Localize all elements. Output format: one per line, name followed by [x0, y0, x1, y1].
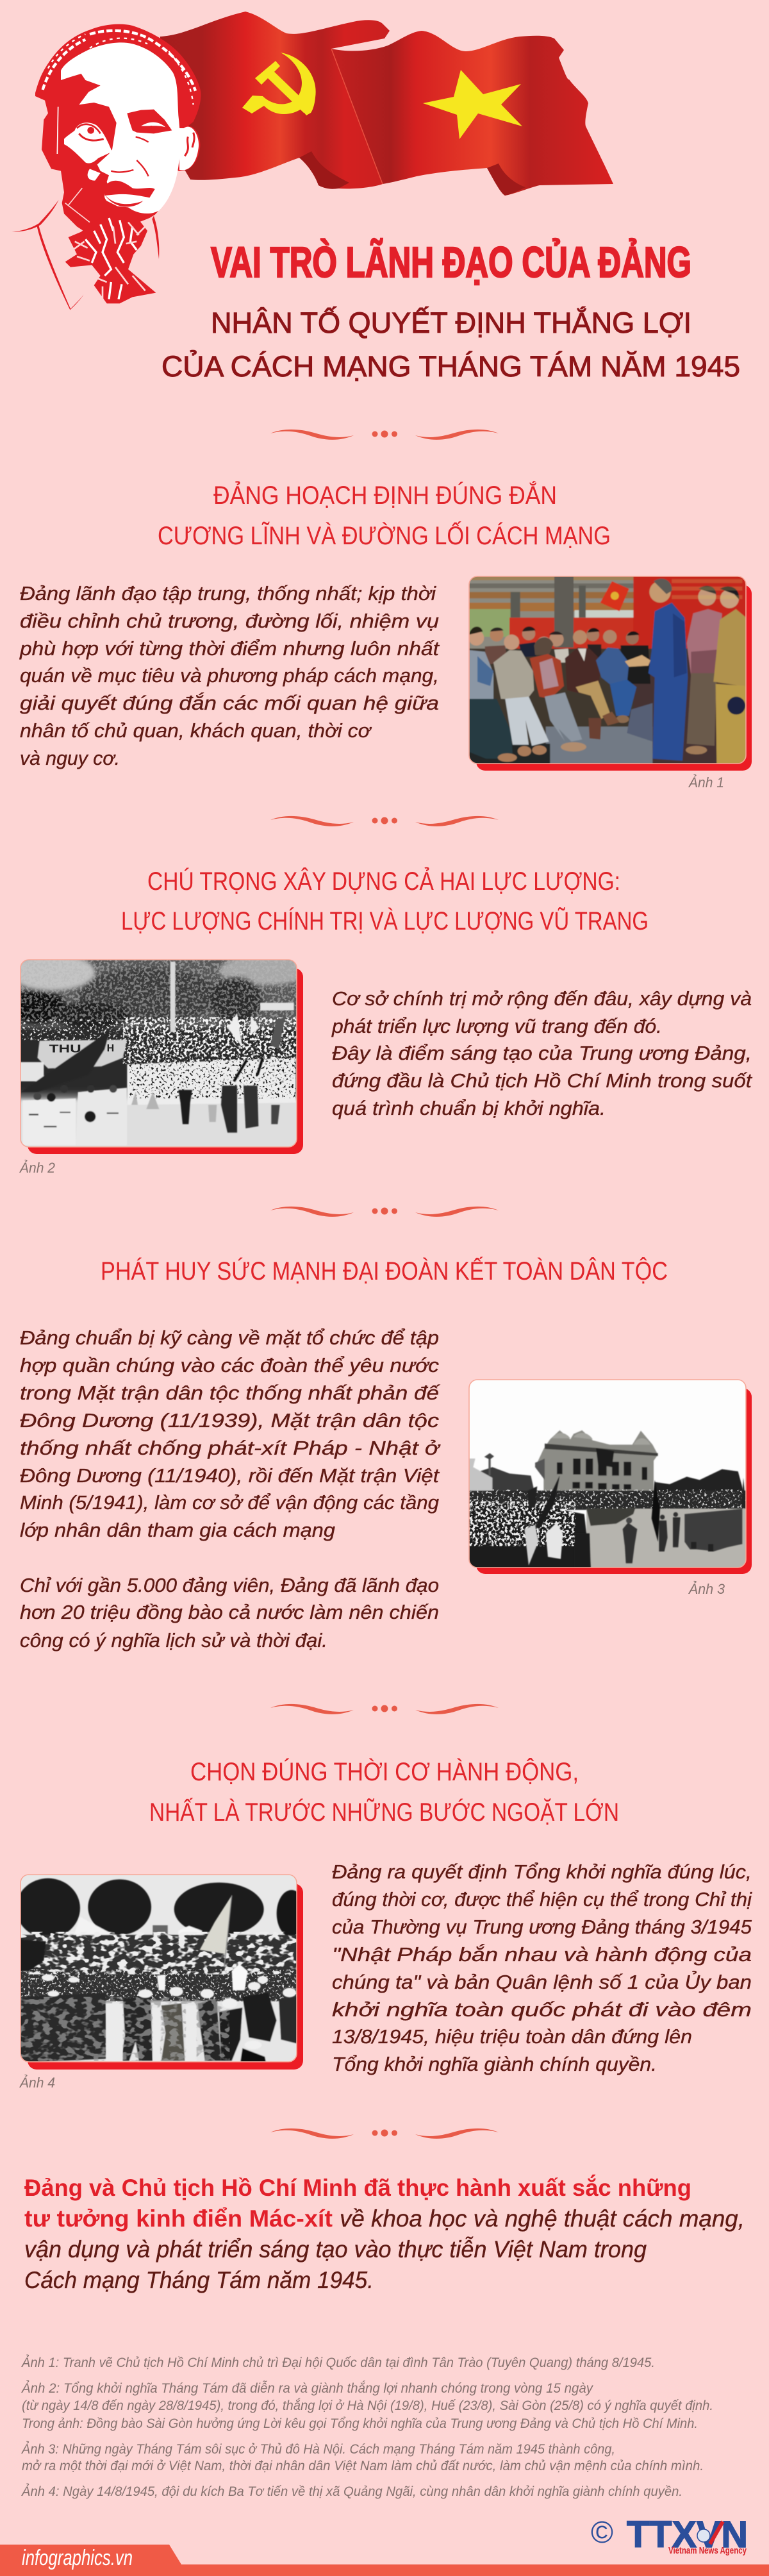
- text block: section 3: hơn 20 triệu đồng bào cả nước làm nên chiến: [20, 1601, 439, 1623]
- text block: section 3: Minh (5/1941), làm cơ sở để vận động các tầng: [20, 1491, 439, 1514]
- heading: section 4: CHỌN ĐÚNG THỜI CƠ HÀNH ĐỘNG,: [190, 1757, 579, 1786]
- text block: section 3: Chỉ với gần 5.000 đảng viên, Đảng đã lãnh đạo: [20, 1574, 439, 1596]
- text block: section 4: khởi nghĩa toàn quốc phát đi vào đêm: [332, 1998, 752, 2021]
- photo 2: August uprising in Saigon: [20, 959, 303, 1154]
- text block: section 4: đúng thời cơ, được thể hiện cụ thể trong Chỉ thị: [332, 1888, 752, 1911]
- conclusion text: về khoa học và nghệ thuật cách mạng,: [340, 2205, 745, 2232]
- photo 4: Ba To guerrillas: [16, 1871, 315, 2076]
- conclusion text: [24, 2174, 745, 2293]
- logo: TTXVN: TTXVN: [627, 2514, 748, 2555]
- footer site name: infographics.vn: [22, 2546, 133, 2570]
- caption: Ảnh 4: Ảnh 4: [19, 2075, 55, 2091]
- heading: section 1: ĐẢNG HOẠCH ĐỊNH ĐÚNG ĐẮN: [213, 480, 557, 510]
- text block: section 1: giải quyết đúng đắn các mối quan hệ giữa: [20, 692, 439, 714]
- divider ornament: [270, 816, 499, 826]
- text block: section 3: Đông Dương (11/1940), rồi đến Mặt trận Việt: [20, 1464, 440, 1487]
- photo notes: Ảnh 2: Tổng khởi nghĩa Tháng Tám đã diễn ra và giành thắng lợi nhanh chóng trong vòng 15 ngày: [21, 2380, 593, 2396]
- logo: TTXVN: Vietnam News Agency: [668, 2545, 747, 2556]
- text block: section 2: quá trình chuẩn bị khởi nghĩa.: [332, 1097, 606, 1119]
- text block: section 2: [331, 987, 752, 1119]
- conclusion text: vận dụng và phát triển sáng tạo vào thực tiễn Việt Nam trong: [24, 2236, 647, 2262]
- subtitle: NHÂN TỐ QUYẾT ĐỊNH THẮNG LỢI: [211, 306, 691, 339]
- photo 3: Hanoi Opera House crowd: [468, 1379, 752, 1574]
- photo 1: painting of Tan Trao congress: [468, 576, 752, 771]
- conclusion text: tư tưởng kinh điển Mác-xít: [24, 2205, 333, 2232]
- subtitle: CỦA CÁCH MẠNG THÁNG TÁM NĂM 1945: [161, 350, 740, 383]
- text block: section 2: phát triển lực lượng vũ trang đến đó.: [331, 1015, 662, 1037]
- text block: section 4: chúng ta" và bản Quân lệnh số 1 của Ủy ban: [332, 1970, 752, 1993]
- text block: section 1: [19, 582, 440, 769]
- logo: TTXVN: ©: [591, 2516, 613, 2550]
- photo 2: August uprising in Saigon: THU: [49, 1042, 81, 1055]
- text block: section 3: Đông Dương (11/1939), Mặt trận dân tộc: [20, 1409, 440, 1432]
- text block: section 4: của Thường vụ Trung ương Đảng tháng 3/1945: [332, 1916, 752, 1938]
- text block: section 4: 13/8/1945, hiệu triệu toàn dân đứng lên: [332, 2025, 692, 2048]
- text block: section 4: "Nhật Pháp bắn nhau và hành động của: [332, 1943, 752, 1966]
- text block: section 3: Đảng chuẩn bị kỹ càng về mặt tổ chức để tập: [20, 1326, 439, 1349]
- text block: section 3: công có ý nghĩa lịch sử và thời đại.: [20, 1629, 327, 1652]
- national flag: [331, 31, 613, 196]
- photo notes: mở ra một thời đại mới ở Việt Nam, thời đại nhân dân Việt Nam làm chủ đất nước, làm chủ vận mệnh của chính mình.: [22, 2459, 704, 2473]
- caption: Ảnh 3: Ảnh 3: [688, 1581, 725, 1597]
- text block: section 2: Đây là điểm sáng tạo của Trung ương Đảng,: [332, 1042, 752, 1064]
- panel: section 2: [8, 866, 752, 1176]
- text block: section 2: Cơ sở chính trị mở rộng đến đâu, xây dựng và: [332, 987, 752, 1010]
- text block: section 3: [20, 1326, 441, 1652]
- divider ornament: [270, 430, 499, 440]
- text block: section 3: thống nhất chống phát-xít Pháp - Nhật ở: [20, 1437, 441, 1459]
- text block: section 1: phù hợp với từng thời điểm nhưng luôn nhất: [19, 637, 440, 660]
- text block: section 1: điều chỉnh chủ trương, đường lối, nhiệm vụ: [20, 610, 439, 632]
- heading: section 2: CHÚ TRỌNG XÂY DỰNG CẢ HAI LỰC LƯỢNG:: [147, 866, 620, 896]
- heading: section 1: CƯƠNG LĨNH VÀ ĐƯỜNG LỐI CÁCH MẠNG: [158, 521, 611, 550]
- panel: section 3: [20, 1256, 764, 1652]
- text block: section 4: [332, 1861, 752, 2075]
- divider ornament: [270, 1704, 499, 1714]
- heading: section 4: [149, 1757, 619, 1827]
- footer band: [0, 2545, 769, 2576]
- photo notes: Ảnh 3: Những ngày Tháng Tám sôi sục ở Thủ đô Hà Nội. Cách mạng Tháng Tám năm 1945 thành công,: [21, 2441, 615, 2457]
- photo notes: (từ ngày 14/8 đến ngày 28/8/1945), trong đó, thắng lợi ở Hà Nội (19/8), Huế (23/8), Sài Gòn (25/8) có ý nghĩa quyết định.: [22, 2398, 713, 2413]
- photo notes: [21, 2355, 713, 2499]
- text block: section 1: nhân tố chủ quan, khách quan, thời cơ: [20, 719, 372, 742]
- party flag: [160, 12, 390, 189]
- heading: section 2: LỰC LƯỢNG CHÍNH TRỊ VÀ LỰC LƯỢNG VŨ TRANG: [121, 907, 649, 935]
- caption: Ảnh 2: Ảnh 2: [19, 1160, 55, 1176]
- photo 2: August uprising in Saigon: H: [107, 1043, 114, 1054]
- photo notes: Ảnh 4: Ngày 14/8/1945, đội du kích Ba Tơ tiến về thị xã Quảng Ngãi, cùng nhân dân khởi nghĩa giành chính quyền.: [21, 2484, 682, 2499]
- text block: section 2: đứng đầu là Chủ tịch Hồ Chí Minh trong suốt: [332, 1069, 752, 1092]
- text block: section 1: quán về mục tiêu và phương pháp cách mạng,: [20, 664, 439, 687]
- text block: section 3: trong Mặt trận dân tộc thống nhất phản đế: [20, 1382, 441, 1404]
- header banner with flags and portrait: [12, 12, 613, 310]
- conclusion text: Cách mạng Tháng Tám năm 1945.: [24, 2267, 374, 2293]
- divider ornament: [270, 2129, 499, 2139]
- photo notes: Trong ảnh: Đồng bào Sài Gòn hưởng ứng Lời kêu gọi Tổng khởi nghĩa của Trung ương Đảng và Chủ tịch Hồ Chí Minh.: [22, 2416, 698, 2431]
- text block: section 3: hợp quần chúng vào các đoàn thể yêu nước: [20, 1354, 440, 1376]
- text block: section 1: và nguy cơ.: [20, 747, 120, 769]
- text block: section 4: Tổng khởi nghĩa giành chính quyền.: [332, 2053, 657, 2075]
- heading: section 3: PHÁT HUY SỨC MẠNH ĐẠI ĐOÀN KẾT TOÀN DÂN TỘC: [101, 1256, 668, 1285]
- heading: section 1: [158, 480, 611, 550]
- text block: section 3: lớp nhân dân tham gia cách mạng: [20, 1519, 335, 1541]
- subtitle: [161, 306, 740, 383]
- text block: section 4: Đảng ra quyết định Tổng khởi nghĩa đúng lúc,: [332, 1861, 752, 1883]
- portrait of President Ho Chi Minh: [12, 24, 201, 310]
- panel: section 4: [16, 1757, 752, 2091]
- divider ornament: [270, 1207, 499, 1217]
- heading: section 2: [121, 866, 649, 935]
- conclusion text: Đảng và Chủ tịch Hồ Chí Minh đã thực hành xuất sắc những: [24, 2174, 691, 2201]
- heading: section 4: NHẤT LÀ TRƯỚC NHỮNG BƯỚC NGOẶT LỚN: [149, 1797, 619, 1827]
- caption: Ảnh 1: Ảnh 1: [688, 774, 724, 790]
- panel: section 1: [19, 480, 764, 790]
- photo notes: Ảnh 1: Tranh vẽ Chủ tịch Hồ Chí Minh chủ trì Đại hội Quốc dân tại đình Tân Trào (Tuyên Quang) tháng 8/1945.: [21, 2355, 655, 2370]
- text block: section 1: Đảng lãnh đạo tập trung, thống nhất; kịp thời: [20, 582, 436, 605]
